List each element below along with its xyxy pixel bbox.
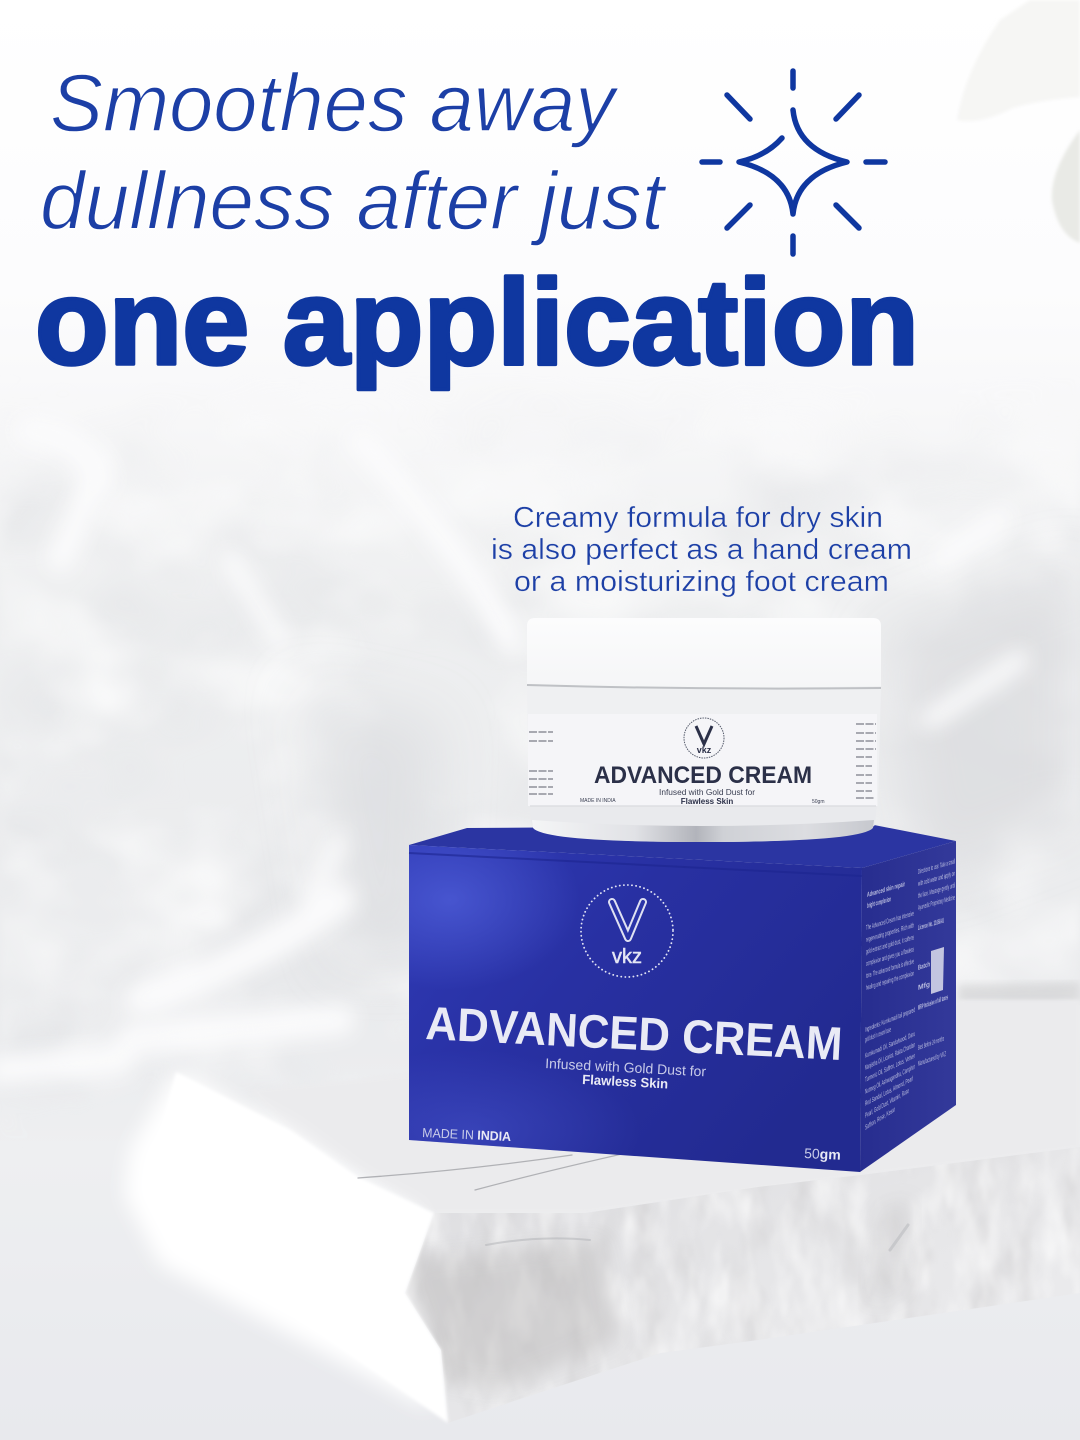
box top <box>409 825 956 868</box>
box side small print: Advanced skin repair <box>867 880 905 899</box>
box side small print: Red Sandal, Lotus, Almond, Pearl <box>865 1074 913 1108</box>
box side small print: tone. The advanced formula is effective <box>866 957 914 980</box>
box side small print: Kumkumadi Oil, Sandalwood, Daru <box>865 1029 915 1060</box>
caption text <box>491 502 912 598</box>
title: bold line: one application <box>35 254 919 390</box>
box weight: 50gm <box>804 1145 841 1163</box>
jar body <box>527 686 881 806</box>
box front <box>409 845 862 1172</box>
box side small print: Best Before 24 months <box>918 1034 944 1052</box>
product: box: Flawless Skin <box>582 1072 669 1091</box>
box side small print: The Advanced Cream has intensive <box>866 909 914 932</box>
box side small print: Manjistha Oil, Licorice, Rakta Chandan <box>865 1040 915 1072</box>
box side small print: bright complexion <box>867 895 891 910</box>
box made in india: MADE IN INDIA <box>422 1125 512 1144</box>
box side small print: regenerating properties. Rich with <box>866 921 914 944</box>
box logo: vkz <box>612 946 642 968</box>
background: leaf top right <box>957 0 1080 243</box>
infographic canvas: Ayurvedic Proprietary Medicine <box>918 894 955 912</box>
box side small print: Mfg <box>918 980 930 992</box>
marble bright left face <box>124 1070 430 1410</box>
box side small print: complexion and gives you a flawless <box>866 945 914 968</box>
jar logo <box>684 718 724 758</box>
jar base <box>529 804 877 842</box>
jar logo: vkz <box>697 745 712 755</box>
icon: sparkle <box>702 71 885 254</box>
box side small print: Pearl, Gold Dust, Vitamin, Rose <box>865 1086 909 1120</box>
infographic canvas: with cold water and apply on <box>918 870 955 888</box>
marble veins <box>358 1150 908 1250</box>
box side small print: Nutmeg Oil, Ashwagandha, Camphor <box>865 1062 915 1096</box>
title: light italic lines: dullness after just <box>40 156 667 247</box>
box side small print: Manufactured by VKZ <box>918 1049 946 1068</box>
box side label <box>931 947 944 994</box>
box side small print <box>865 857 955 1132</box>
caption text: or a moisturizing foot cream <box>514 566 889 598</box>
marble top surface <box>250 1000 1080 1213</box>
infographic canvas: Directions to use: Take a small <box>918 857 955 876</box>
caption text: is also perfect as a hand cream <box>491 534 912 566</box>
box side small print: gold extract and gold dust, it softens <box>866 933 914 956</box>
product: jar: MADE IN INDIA <box>580 798 616 804</box>
jar label <box>528 714 877 806</box>
box side small print: healing and repairing the complexion <box>866 969 914 992</box>
jar lid <box>527 618 881 688</box>
box side small print: Licence No. 1166/AU <box>918 917 944 932</box>
title: light italic lines: Smoothes away <box>50 58 620 149</box>
product: box <box>408 825 956 1172</box>
marble stone block <box>124 982 1080 1423</box>
title: light italic lines <box>40 58 667 247</box>
product: jar: Flawless Skin <box>681 797 733 806</box>
table shadow band right <box>958 982 1080 1003</box>
box side small print: gold dust in cream base <box>865 1025 891 1044</box>
marble front face <box>405 1147 1080 1423</box>
box logo <box>581 885 673 977</box>
product: jar: Infused with Gold Dust for <box>659 788 755 797</box>
jar side small print <box>529 724 876 798</box>
marble grey patch <box>400 1200 910 1390</box>
product: jar <box>527 618 881 842</box>
jar product name: ADVANCED CREAM <box>594 762 812 789</box>
box side small print: Ingredients: Kumkumadi tail prepared <box>865 1005 915 1034</box>
caption text: Creamy formula for dry skin <box>513 502 883 534</box>
box side small print: Batch <box>918 960 930 972</box>
product: jar: 50gm <box>812 799 825 805</box>
box side small print: Saffron, Rose, Kesar <box>865 1105 895 1132</box>
box side small print: Turmeric Oil, Saffron, Lotus, Vetiver <box>865 1051 915 1084</box>
box right side <box>860 841 956 1172</box>
box tagline: Infused with Gold Dust for <box>545 1055 707 1079</box>
infographic canvas: MRP Inclusive of all taxes <box>918 992 948 1012</box>
infographic canvas: the face. Massage gently until <box>918 881 955 900</box>
box product name: ADVANCED CREAM <box>424 996 844 1070</box>
